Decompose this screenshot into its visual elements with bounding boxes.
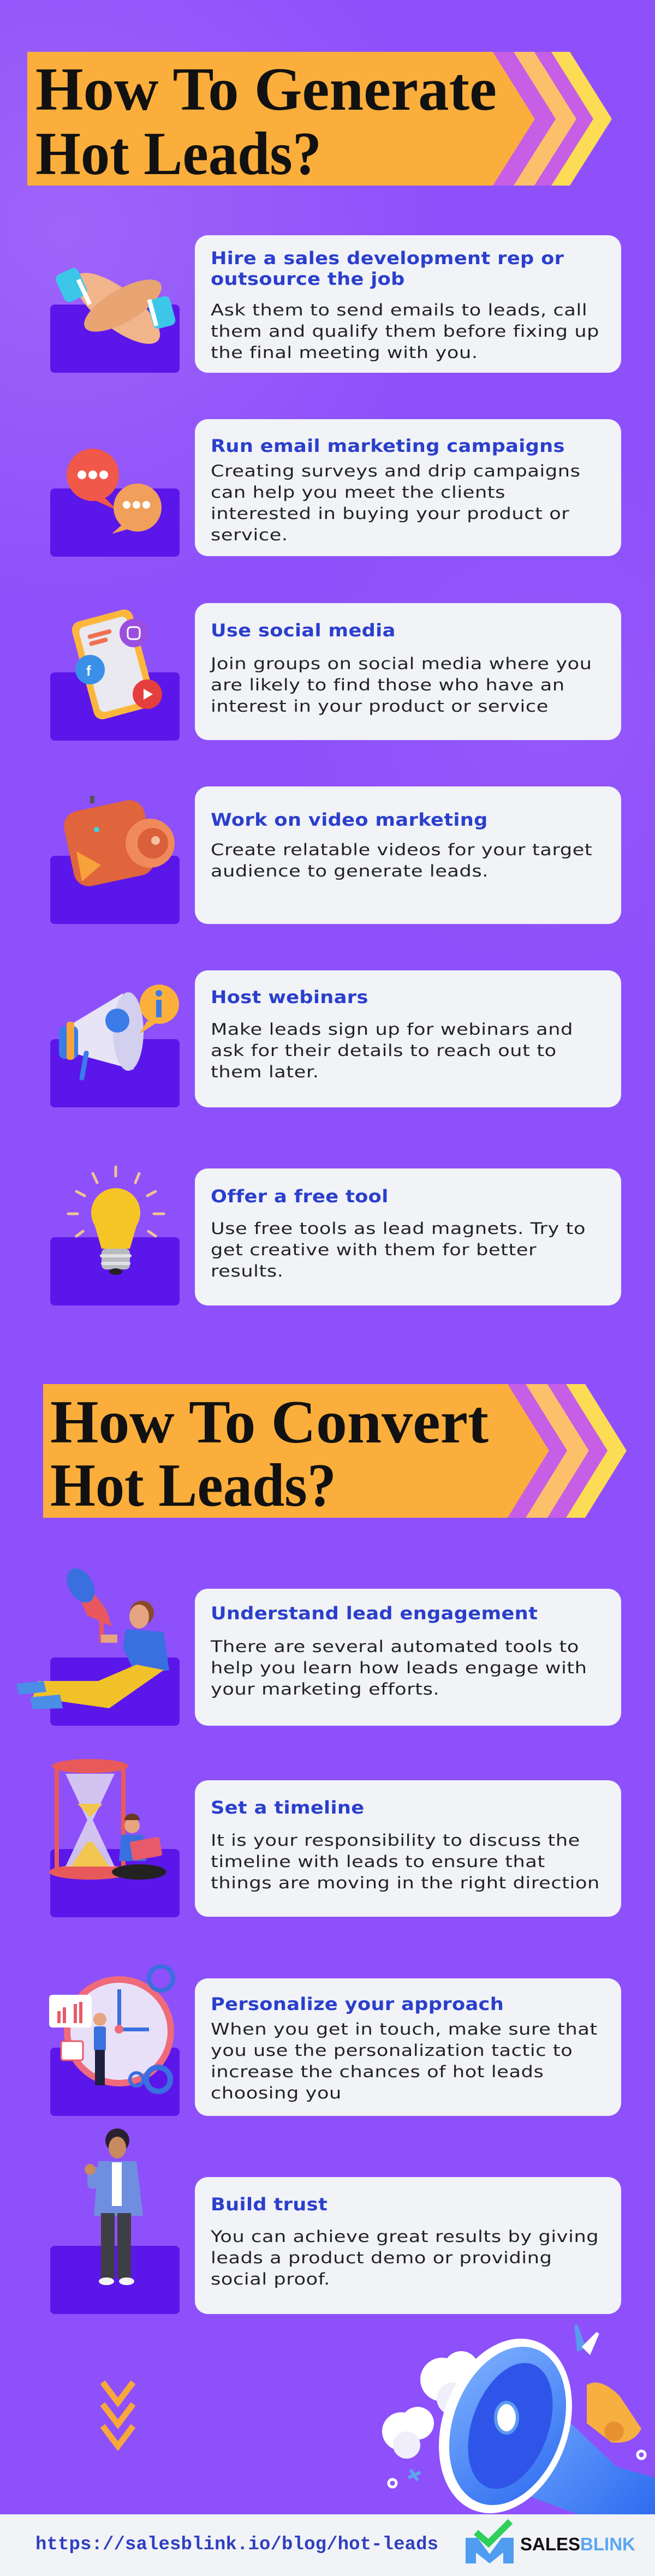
heading: free tool: Offer a free tool — [211, 1186, 389, 1207]
text: lead engagement: help you learn how leads engage with — [211, 1659, 587, 1677]
text: webinars: them later. — [211, 1063, 319, 1081]
text: email marketing: can help you meet the clients — [211, 483, 505, 502]
card: email marketing — [195, 419, 621, 556]
text: build trust — [211, 2227, 599, 2288]
heading: lead engagement: Understand lead engagement — [211, 1603, 538, 1624]
card: build trust — [195, 2177, 621, 2314]
text: social media: are likely to find those who have an — [211, 676, 565, 694]
icon: video camera — [61, 796, 175, 889]
icon: social phone: f — [86, 663, 91, 679]
card: personalize — [195, 1978, 621, 2116]
text: hire SDR: them and qualify them before fixing up — [211, 322, 599, 341]
heading: email marketing: Run email marketing campaigns — [211, 436, 565, 456]
text: email marketing: service. — [211, 526, 288, 544]
text: hire SDR: the final meeting with you. — [211, 343, 478, 362]
heading: webinars: Host webinars — [211, 987, 368, 1007]
text: personalize: you use the personalization tactic to — [211, 2041, 573, 2060]
text: timeline: things are moving in the right direction — [211, 1874, 600, 1892]
icon: clock with presenter — [49, 1966, 173, 2091]
text: build trust: social proof. — [211, 2270, 330, 2288]
text: timeline: It is your responsibility to discuss the — [211, 1831, 580, 1850]
heading: video marketing: Work on video marketing — [211, 809, 488, 830]
heading: hire SDR: outsource the job — [211, 269, 405, 289]
title: How To Generate Hot Leads?: How To Generate — [35, 56, 497, 123]
text: personalize: When you get in touch, make sure that — [211, 2020, 598, 2038]
heading: social media: Use social media — [211, 620, 396, 641]
text: build trust: leads a product demo or providing — [211, 2249, 552, 2267]
card: social media — [195, 603, 621, 740]
text: timeline: timeline with leads to ensure that — [211, 1852, 545, 1871]
text: social media — [210, 654, 592, 715]
card: lead engagement — [195, 1589, 621, 1726]
icon: person with megaphone — [16, 1564, 169, 1709]
text: video marketing: Create relatable videos for your target — [211, 840, 592, 859]
text: email marketing — [211, 462, 580, 544]
heading: hire SDR: Hire a sales development rep or — [211, 248, 564, 269]
footer bar — [0, 2514, 655, 2576]
arrow: down chevrons — [103, 2382, 133, 2446]
banner: convert — [43, 1384, 627, 1519]
text: lead engagement: There are several automated tools to — [211, 1637, 579, 1656]
card: free tool — [195, 1168, 621, 1305]
text: video marketing — [211, 840, 592, 880]
icon: hourglass with person — [49, 1759, 166, 1880]
footer url: https://salesblink.io/blog/hot-leads — [35, 2535, 438, 2555]
text: social media: interest in your product or service — [211, 697, 549, 715]
text: webinars: Make leads sign up for webinars and — [211, 1020, 573, 1039]
card: hire SDR — [195, 235, 621, 373]
card: timeline — [195, 1780, 621, 1917]
text: personalize — [211, 2020, 598, 2102]
icon: webinar megaphone — [59, 985, 179, 1081]
heading: hire SDR — [211, 248, 564, 289]
title: How To Convert Hot Leads?: Hot Leads? — [50, 1452, 336, 1519]
text: social media: Join groups on social media where you — [211, 654, 592, 673]
card: webinars — [195, 970, 621, 1107]
text: free tool: results. — [211, 1262, 284, 1280]
logo: SALESBLINK — [520, 2534, 635, 2554]
icon: social phone — [70, 607, 162, 721]
text: video marketing: audience to generate leads. — [211, 862, 489, 880]
heading: build trust: Build trust — [211, 2194, 327, 2215]
text: webinars — [211, 1020, 573, 1081]
title: How To Convert Hot Leads?: How To Convert — [50, 1388, 489, 1456]
text: timeline — [211, 1831, 600, 1892]
heading: timeline: Set a timeline — [211, 1797, 364, 1818]
text: lead engagement — [211, 1637, 587, 1698]
text: email marketing: Creating surveys and drip campaigns — [211, 462, 580, 480]
icon: handshake — [54, 261, 177, 356]
title: How To Convert Hot Leads? — [50, 1388, 489, 1519]
text: email marketing: interested in buying your product or — [211, 504, 569, 523]
title: How To Generate Hot Leads?: Hot Leads? — [35, 120, 321, 188]
text: hire SDR — [211, 301, 599, 362]
text: hire SDR: Ask them to send emails to leads, call — [211, 301, 587, 319]
title: How To Generate Hot Leads? — [35, 56, 497, 188]
icon: big megaphone — [382, 2320, 655, 2532]
icon: light bulb — [68, 1167, 164, 1275]
text: build trust: You can achieve great results by giving — [211, 2227, 599, 2246]
heading: personalize: Personalize your approach — [211, 1994, 504, 2014]
banner: generate — [27, 52, 612, 188]
text: free tool: get creative with them for better — [211, 1241, 537, 1259]
icon: standing man — [85, 2128, 143, 2285]
logo — [466, 2521, 635, 2563]
text: personalize: increase the chances of hot leads — [211, 2062, 544, 2081]
text: personalize: choosing you — [211, 2084, 342, 2102]
text: free tool: Use free tools as lead magnets. Try to — [211, 1219, 586, 1238]
text: webinars: ask for their details to reach out to — [211, 1041, 557, 1060]
text: lead engagement: your marketing efforts. — [211, 1680, 439, 1698]
purple squares — [50, 305, 180, 2314]
card: video marketing — [195, 786, 621, 924]
background glow — [0, 0, 655, 982]
icon: chat bubbles — [67, 449, 162, 534]
text: free tool — [211, 1219, 586, 1280]
